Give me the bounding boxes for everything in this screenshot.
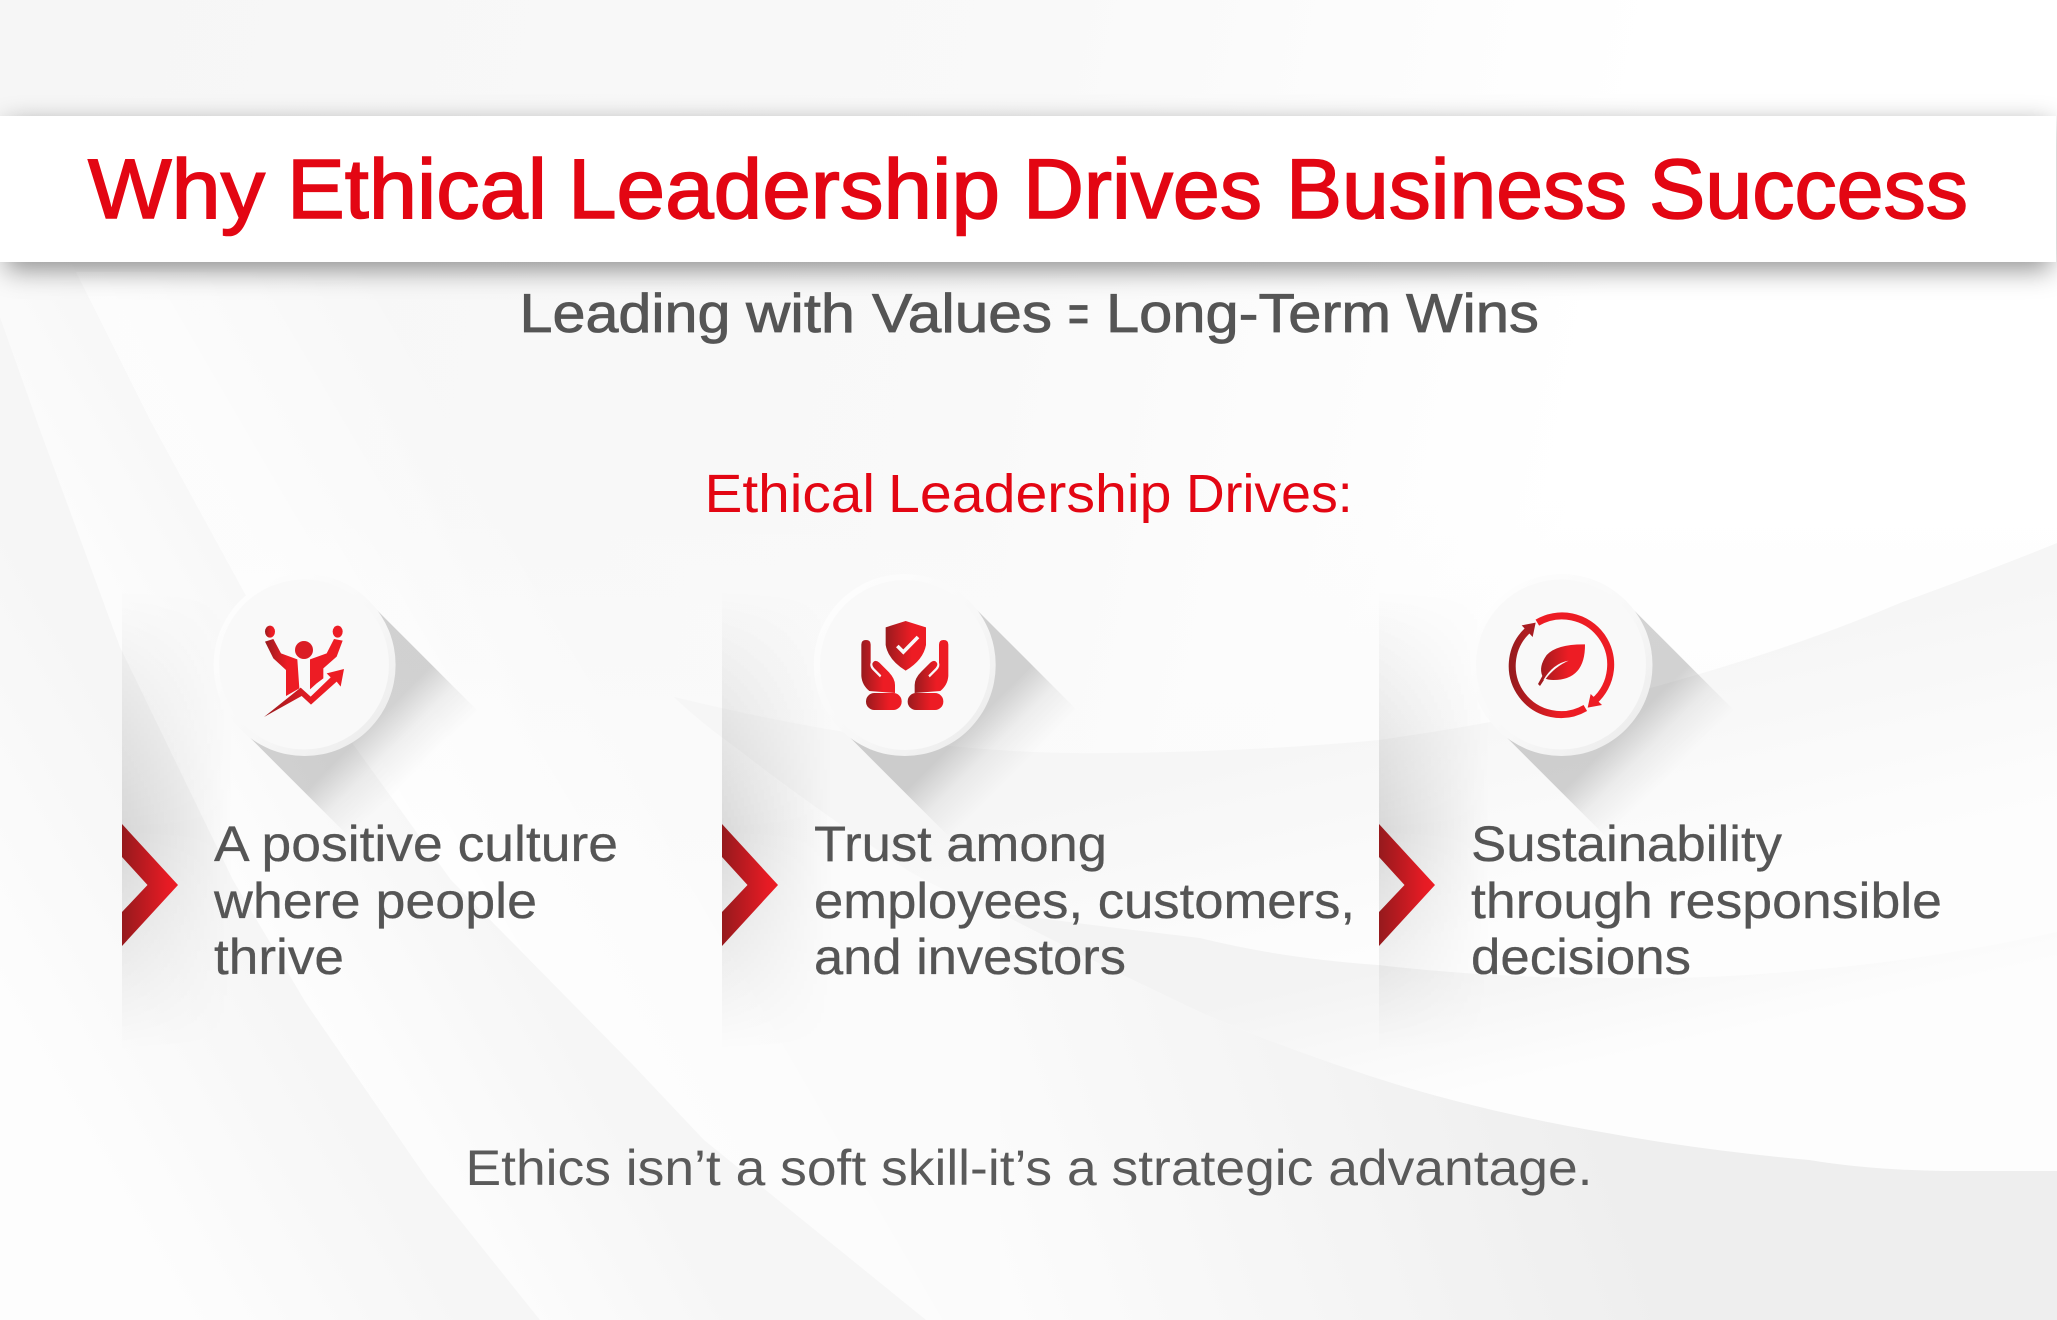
panel: trust [722, 610, 1350, 994]
text: sustainability: decisions [1471, 929, 1691, 985]
icon circle [814, 574, 996, 756]
text: trust: Trust among [814, 816, 1107, 872]
section heading: Leadership [888, 464, 1172, 524]
circle long shadow [841, 601, 1078, 838]
title: Leadership [568, 142, 1000, 236]
circle long shadow [1498, 601, 1735, 838]
text: positive culture: where people [213, 873, 537, 929]
text: trust: employees, customers, [814, 873, 1355, 929]
title: Why [88, 142, 265, 236]
chevron [122, 824, 178, 946]
text: sustainability: through responsible [1471, 873, 1942, 929]
text: trust: and investors [814, 929, 1126, 985]
icon circle [214, 574, 396, 756]
text: sustainability: Sustainability [1471, 816, 1782, 872]
section heading: Ethical [704, 464, 875, 524]
subtitle: = [1068, 282, 1089, 344]
text: positive culture: A positive culture [214, 816, 618, 872]
section heading: Drives: [1186, 464, 1353, 524]
subtitle: Leading [520, 282, 730, 344]
title: Success [1649, 142, 1968, 236]
panel: sustainability [1379, 611, 1940, 994]
chevron [1379, 824, 1435, 946]
subtitle: Long-Term [1106, 282, 1391, 344]
icon: leaf in recycling ring [1512, 616, 1611, 715]
text: positive culture: thrive [214, 929, 344, 985]
circle long shadow [241, 601, 478, 838]
subtitle: with [745, 282, 855, 344]
chevron [722, 824, 778, 946]
subtitle: Wins [1406, 282, 1539, 344]
title: Ethical [287, 142, 547, 236]
footer statement: Ethics isn’t a soft skill-it’s a strategic advantage. [466, 1140, 1592, 1196]
icon: person with rising arrow [264, 626, 344, 717]
panel: positive culture [122, 610, 616, 994]
icon: hands holding shield [861, 621, 948, 710]
title: Business [1286, 142, 1627, 236]
title: Drives [1023, 142, 1262, 236]
subtitle: Values [872, 282, 1052, 344]
title banner [0, 116, 2056, 270]
icon circle [1470, 574, 1652, 756]
